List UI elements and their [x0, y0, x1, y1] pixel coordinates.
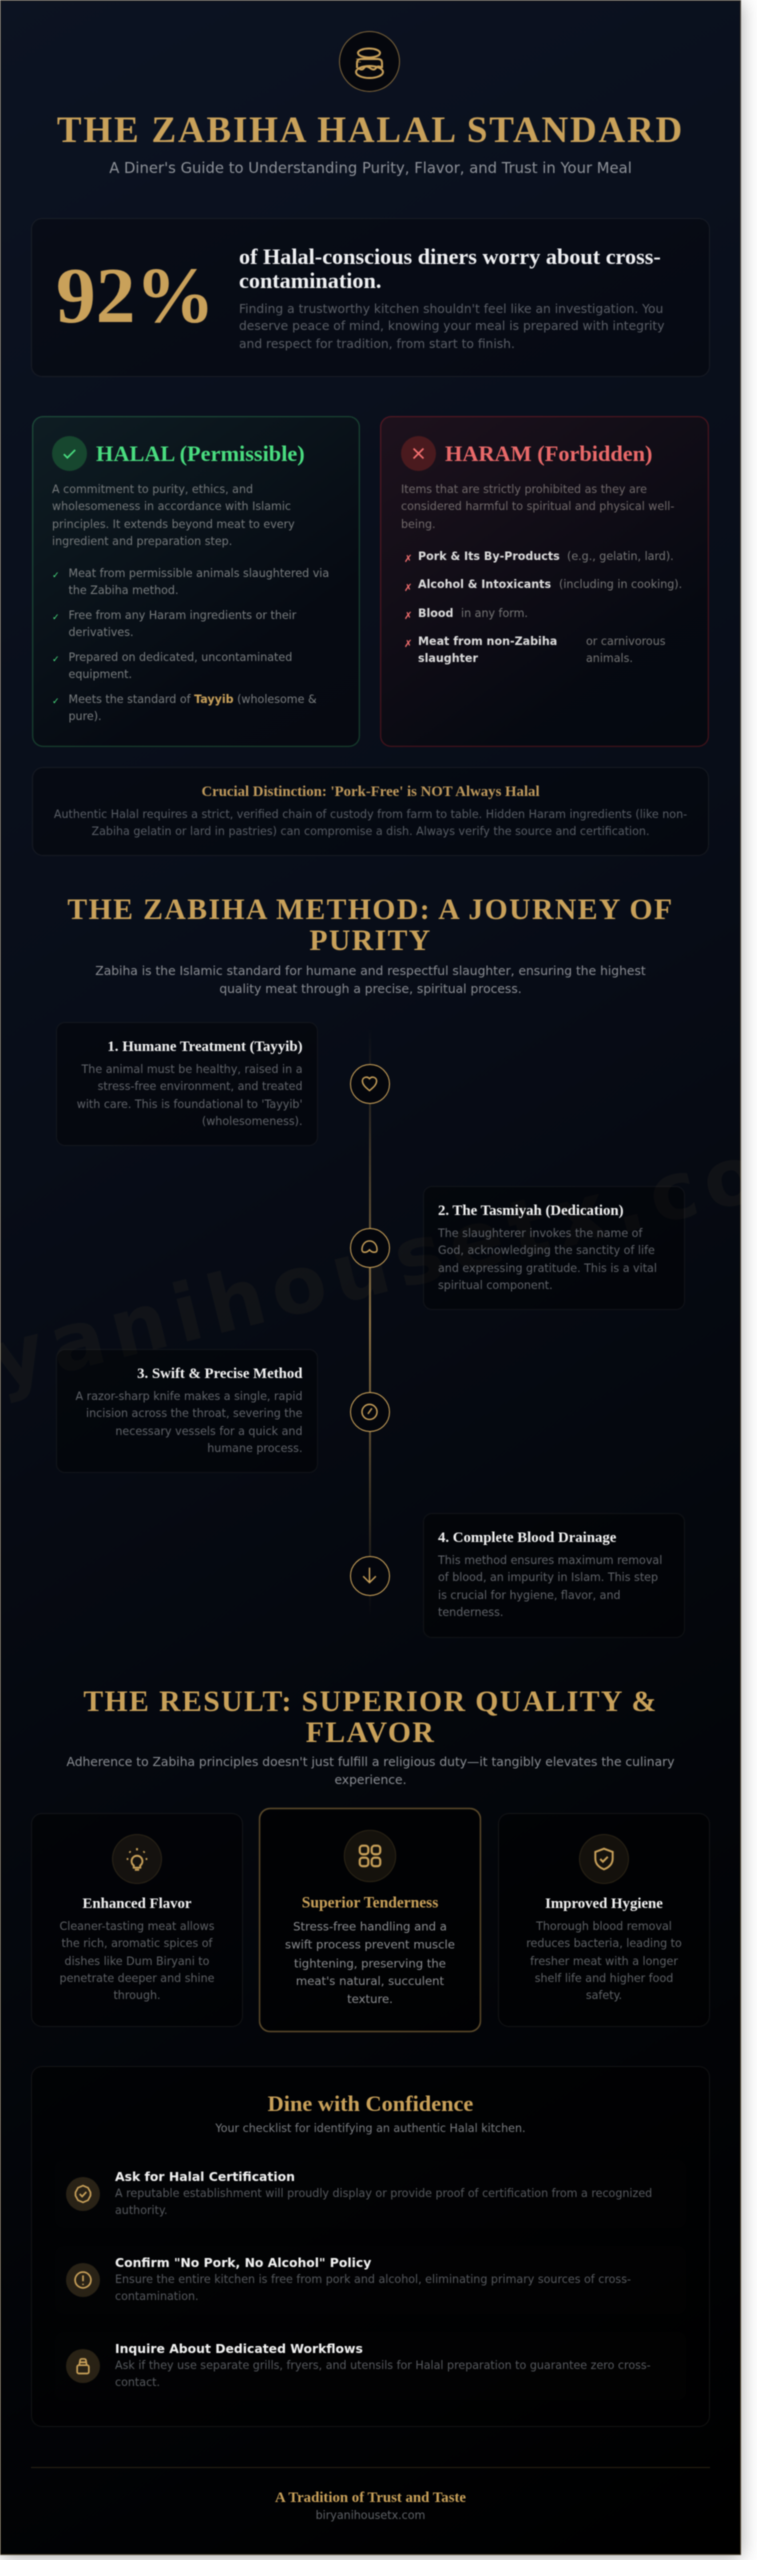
item: certification — [55, 2160, 686, 2228]
item: workflows — [55, 2332, 686, 2400]
halal list: equipment. — [68, 668, 132, 681]
card title: Superior Tenderness — [302, 1895, 438, 1912]
item text: Ask if they use separate grills, fryers, and utensils for Halal preparation to guarantee zero cross- — [115, 2359, 651, 2372]
step text: spiritual component. — [438, 1279, 553, 1292]
haram list: ✗ — [404, 611, 412, 622]
halal list: Meets the standard of Tayyib (wholesome & — [68, 693, 317, 706]
haram list: ✗ — [404, 582, 412, 594]
checklist title: Dine with Confidence — [268, 2091, 473, 2116]
section intro: method: quality meat through a precise, spiritual process. — [219, 982, 522, 996]
heading: zabiha method: PURITY — [309, 924, 432, 956]
card text: Stress-free handling and a — [293, 1920, 447, 1934]
card: superior tenderness — [259, 1808, 481, 2032]
card text: through. — [113, 1989, 161, 2002]
distinction text — [54, 808, 687, 838]
icon: shield — [579, 1834, 629, 1884]
panel: halal — [32, 416, 360, 747]
footer title: A Tradition of Trust and Taste — [275, 2490, 466, 2506]
halal description: wholesomeness in accordance with Islamic — [52, 500, 291, 513]
halal list: Meat from permissible animals slaughtered via — [68, 567, 329, 580]
footer url: biryanihousetx.com — [316, 2509, 425, 2522]
haram list: (including in cooking). — [559, 578, 682, 591]
step text — [75, 1390, 302, 1455]
item text: A reputable establishment will proudly display or provide proof of certification from a recognized — [115, 2187, 652, 2200]
footer — [31, 2467, 710, 2537]
card text — [285, 1920, 455, 2006]
step text: God, acknowledging the sanctity of life — [438, 1244, 655, 1257]
item: policy — [55, 2246, 686, 2314]
heading: zabiha method: THE ZABIHA METHOD: A JOURNEY OF — [67, 894, 674, 926]
item text: Ensure the entire kitchen is free from pork and alcohol, eliminating primary sources of cross- — [115, 2273, 631, 2286]
card text: Thorough blood removal — [536, 1920, 672, 1933]
step title: 1. Humane Treatment (Tayyib) — [107, 1039, 302, 1055]
icon: check — [52, 436, 87, 471]
halal list: ✓ — [52, 613, 60, 623]
panel: crucial distinction — [32, 767, 709, 856]
halal list — [52, 567, 329, 723]
halal list: pure). — [68, 710, 102, 723]
card text: safety. — [586, 1989, 622, 2002]
statistic text: deserve peace of mind, knowing your meal is prepared with integrity — [239, 319, 665, 333]
haram list: slaughter — [418, 652, 478, 665]
halal list: Prepared on dedicated, uncontaminated — [68, 651, 292, 664]
step text: tenderness. — [438, 1606, 503, 1619]
card: enhanced flavor — [31, 1813, 243, 2027]
section intro: result: Adherence to Zabiha principles doesn't just fulfill a religious duty—it tangibly elevates the culinary — [67, 1755, 674, 1769]
heading: result: FLAVOR — [306, 1716, 435, 1748]
statistic text: Finding a trustworthy kitchen shouldn't feel like an investigation. You — [239, 302, 663, 316]
item text — [114, 2359, 651, 2389]
card text: shelf life and higher food — [535, 1972, 673, 1985]
step text: humane process. — [207, 1442, 302, 1455]
step text: with care. This is foundational to 'Tayyib' — [77, 1098, 302, 1111]
halal description: principles. It extends beyond meat to every — [52, 518, 295, 531]
card text — [59, 1920, 215, 2002]
card text: meat's natural, succulent — [296, 1974, 444, 1988]
checklist subtitle: Your checklist for identifying an authentic Halal kitchen. — [215, 2122, 526, 2135]
haram description: Items that are strictly prohibited as they are — [401, 483, 647, 496]
step text: and expressing gratitude. This is a vital — [438, 1262, 657, 1275]
statistic text: and respect for tradition, from start to finish. — [239, 337, 515, 351]
panel: statistic — [31, 218, 710, 377]
card text: fresher meat with a longer — [530, 1955, 678, 1968]
halal list: derivatives. — [68, 626, 134, 639]
step text: stress-free environment, and treated — [98, 1080, 302, 1093]
subtitle: A Diner's Guide to Understanding Purity, Flavor, and Trust in Your Meal — [109, 160, 632, 177]
step 2 — [423, 1186, 685, 1310]
card text: penetrate deeper and shine — [60, 1972, 214, 1985]
panel: checklist — [31, 2066, 710, 2427]
haram description — [401, 483, 674, 531]
haram list: Blood — [418, 607, 453, 620]
card text: dishes like Dum Biryani to — [65, 1955, 209, 1968]
step text — [76, 1063, 302, 1128]
step title: 2. The Tasmiyah (Dedication) — [438, 1203, 624, 1219]
icon: arrow node — [350, 1556, 390, 1596]
icon: alert — [66, 2263, 100, 2297]
step text: This method ensures maximum removal — [438, 1554, 662, 1567]
section intro: result: experience. — [334, 1773, 407, 1787]
card text: swift process prevent muscle — [285, 1938, 455, 1952]
title: THE ZABIHA HALAL STANDARD — [57, 110, 684, 151]
haram description: being. — [401, 518, 436, 531]
card text: reduces bacteria, leading to — [526, 1937, 682, 1950]
statistic heading: of Halal-conscious diners worry about cross- — [239, 244, 661, 269]
step text: of blood, an impurity in Islam. This step — [438, 1571, 658, 1584]
step title: 3. Swift & Precise Method — [137, 1366, 302, 1382]
big number: 92% — [56, 252, 215, 340]
step text: incision across the throat, severing the — [86, 1407, 302, 1420]
halal list: Free from any Haram ingredients or their — [68, 609, 296, 622]
card text: texture. — [347, 1993, 393, 2006]
halal list: ✓ — [52, 571, 60, 581]
haram list: ✗ — [404, 554, 412, 565]
step 1 — [56, 1022, 318, 1146]
item text — [115, 2273, 631, 2303]
distinction text: Zabiha gelatin or lard in pastries) can compromise a dish. Always verify the source and certification. — [92, 825, 649, 838]
heading: result: THE RESULT: SUPERIOR QUALITY & — [83, 1686, 658, 1718]
icon: heart node — [350, 1064, 390, 1104]
timeline line — [369, 1030, 371, 1616]
haram list: Meat from non-Zabiha — [418, 635, 557, 648]
step text: (wholesomeness). — [202, 1115, 302, 1128]
item title: Confirm "No Pork, No Alcohol" Policy — [115, 2255, 371, 2270]
step text: The animal must be healthy, raised in a — [82, 1063, 302, 1076]
distinction text: Authentic Halal requires a strict, verified chain of custody from farm to table. Hidden Haram ingredients (like non- — [54, 808, 687, 821]
haram list: or carnivorous — [586, 635, 666, 648]
card text — [526, 1920, 682, 2002]
step 4 — [423, 1513, 685, 1638]
halal description: A commitment to purity, ethics, and — [52, 483, 253, 496]
statistic heading — [238, 244, 661, 293]
distinction title: Crucial Distinction: 'Pork-Free' is NOT Always Halal — [201, 784, 540, 800]
section intro: method: Zabiha is the Islamic standard for humane and respectful slaughter, ensuring the highest — [95, 964, 646, 978]
step text — [438, 1227, 657, 1292]
statistic heading: contamination. — [239, 268, 381, 293]
halal list: ✓ — [52, 655, 60, 665]
card: improved hygiene — [498, 1813, 710, 2027]
icon: logo — [339, 31, 400, 92]
card text: the rich, aromatic spices of — [62, 1937, 212, 1950]
item text: contamination. — [115, 2290, 199, 2303]
icon: jar — [66, 2349, 100, 2383]
haram list: ✗ — [404, 639, 412, 650]
item text — [114, 2187, 652, 2217]
icon: gauge node — [350, 1392, 390, 1432]
icon: grid — [344, 1830, 396, 1882]
statistic text — [239, 302, 665, 351]
haram list: Alcohol & Intoxicants — [418, 578, 551, 591]
step text: is crucial for hygiene, flavor, and — [438, 1589, 621, 1602]
halal list: the Zabiha method. — [68, 584, 178, 597]
step text: The slaughterer invokes the name of — [438, 1227, 642, 1240]
haram list: animals. — [586, 652, 633, 665]
item text: contact. — [115, 2376, 160, 2389]
halal description — [52, 483, 295, 548]
step text — [438, 1554, 662, 1619]
card title: Improved Hygiene — [545, 1896, 663, 1912]
icon: bulb — [112, 1834, 162, 1884]
item title: Ask for Halal Certification — [115, 2169, 295, 2184]
haram list: (e.g., gelatin, lard). — [567, 550, 674, 563]
section intro: result — [66, 1755, 674, 1787]
card text: tightening, preserving the — [294, 1956, 446, 1970]
haram description: considered harmful to spiritual and physical well- — [401, 500, 674, 513]
icon: badge — [66, 2177, 100, 2211]
halal description: ingredient and preparation step. — [52, 535, 232, 548]
card text: Cleaner-tasting meat allows — [59, 1920, 215, 1933]
icon: dome node — [350, 1228, 390, 1268]
heading: zabiha method — [67, 894, 674, 956]
icon: cross — [401, 436, 436, 471]
step text: A razor-sharp knife makes a single, rapid — [76, 1390, 302, 1403]
item title: Inquire About Dedicated Workflows — [115, 2341, 363, 2356]
item text: authority. — [115, 2204, 168, 2217]
card title: Enhanced Flavor — [83, 1896, 191, 1912]
section intro: method — [95, 964, 646, 996]
haram heading: HARAM (Forbidden) — [445, 441, 652, 466]
haram list — [404, 550, 682, 666]
panel: haram — [380, 416, 709, 747]
haram list: in any form. — [461, 607, 528, 620]
haram list: Pork & Its By-Products — [418, 550, 560, 563]
step 3 — [56, 1349, 318, 1473]
step text: necessary vessels for a quick and — [115, 1425, 302, 1438]
step title: 4. Complete Blood Drainage — [438, 1530, 616, 1546]
halal list: ✓ — [52, 697, 60, 707]
halal heading: HALAL (Permissible) — [96, 441, 305, 466]
heading: result — [83, 1686, 658, 1748]
